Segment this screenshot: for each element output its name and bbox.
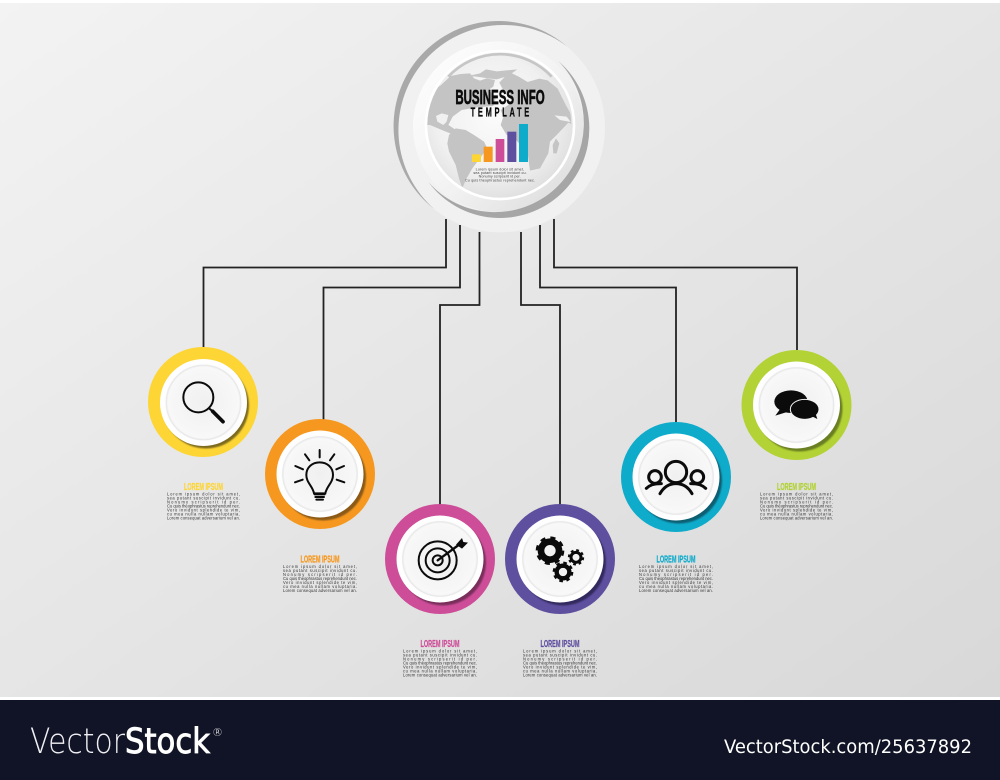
text block: magenta: Nonumy scripserit id per.	[403, 656, 477, 662]
icon: target with arrow	[419, 538, 468, 579]
emblem text: Cu quis theophrastus reprehendunt nec.	[465, 178, 535, 182]
text block: purple: sea putant suscipit invidunt cu.	[523, 652, 597, 658]
text block: green: Cu quis theophrastus reprehendunt nec.	[760, 504, 833, 508]
connector lines	[204, 219, 797, 505]
text block: green	[760, 481, 833, 520]
text block: purple: Nonumy scripserit id per.	[523, 656, 597, 662]
text block: magenta: cu mea nulla nullam voluptaria.	[403, 668, 477, 674]
footer bar	[0, 700, 1000, 780]
light ring	[413, 41, 584, 212]
emblem text: sea putant suscipit invidunt cu.	[473, 171, 527, 175]
emblem text: Nonumy scripserit id per.	[479, 175, 521, 179]
text block: yellow: Nonumy scripserit id per.	[167, 500, 240, 504]
text block: yellow: Lorem ipsum dolor sit amet,	[167, 492, 240, 496]
node: blue people	[621, 422, 731, 532]
outer arc upper left	[394, 21, 567, 209]
text block: magenta: Lorem ipsum dolor sit amet,	[403, 648, 477, 654]
text block: orange: Nonumy scripserit id per.	[283, 572, 357, 577]
text block: blue: Lorem ipsum dolor sit amet,	[639, 564, 713, 569]
emblem text: Lorem ipsum dolor sit amet,	[476, 167, 524, 171]
text block: orange: Lorem consequat adversarium vel an.	[283, 588, 357, 593]
text block: green: Lorem consequat adversarium vel an.	[760, 516, 833, 520]
text block: blue: cu mea nulla nullam voluptaria.	[639, 584, 713, 589]
node: magenta target	[385, 504, 495, 614]
text block: blue: sea putant suscipit invidunt cu.	[639, 568, 713, 573]
text block: yellow: Cu quis theophrastus reprehendunt nec.	[167, 504, 240, 508]
node: yellow magnifier	[148, 347, 258, 457]
text block: purple: LOREM IPSUM	[540, 638, 580, 650]
node: purple gears	[505, 504, 615, 614]
globe disc	[427, 52, 573, 198]
text block: green: Nonumy scripserit id per.	[760, 500, 833, 504]
text block: green: Lorem ipsum dolor sit amet,	[760, 492, 833, 496]
subtitle: TEMPLATE	[471, 105, 532, 120]
text block: yellow: Vero invidunt splendide te vim,	[167, 508, 240, 512]
text block: blue: Cu quis theophrastus reprehendunt nec.	[639, 576, 713, 581]
title: BUSINESS INFO	[455, 86, 545, 109]
icon: people	[646, 461, 706, 494]
text block: orange: cu mea nulla nullam voluptaria.	[283, 584, 357, 589]
text block: green: LOREM IPSUM	[777, 481, 816, 493]
bar chart	[472, 124, 528, 162]
text block: blue: Lorem consequat adversarium vel an.	[639, 588, 713, 593]
text block: magenta: LOREM IPSUM	[420, 638, 460, 650]
text block: green: Vero invidunt splendide te vim,	[760, 508, 833, 512]
footer logo bold part: Stock	[125, 722, 211, 762]
text block: purple	[523, 638, 597, 678]
text block: orange: LOREM IPSUM	[300, 554, 340, 566]
map notches	[436, 113, 571, 125]
text block: blue: Nonumy scripserit id per.	[639, 572, 713, 577]
emblem text	[465, 167, 535, 182]
outer arc lower right	[428, 61, 589, 218]
text block: blue: LOREM IPSUM	[656, 554, 696, 566]
footer registered mark: ®	[212, 726, 223, 739]
text block: magenta: Vero invidunt splendide te vim,	[403, 664, 477, 670]
text block: magenta: Lorem consequat adversarium vel an.	[403, 672, 477, 678]
icon: speech bubbles	[774, 390, 819, 419]
node: orange bulb	[265, 419, 375, 529]
footer image id: VectorStock.com/25637892	[724, 736, 972, 758]
node: green chat	[742, 350, 852, 460]
footer logo light part: Vector	[30, 722, 126, 762]
text block: green: sea putant suscipit invidunt cu.	[760, 496, 833, 500]
text block: purple: cu mea nulla nullam voluptaria.	[523, 668, 597, 674]
text block: orange: Cu quis theophrastus reprehendunt nec.	[283, 576, 357, 581]
text block: orange: Vero invidunt splendide te vim,	[283, 580, 357, 585]
text block: yellow: cu mea nulla nullam voluptaria.	[167, 512, 240, 516]
text block: orange: Lorem ipsum dolor sit amet,	[283, 564, 357, 569]
text block: magenta: sea putant suscipit invidunt cu.	[403, 652, 477, 658]
text block: yellow: Lorem consequat adversarium vel an.	[167, 516, 240, 520]
text block: purple: Lorem ipsum dolor sit amet,	[523, 648, 597, 654]
text block: magenta	[403, 638, 477, 678]
text block: yellow: sea putant suscipit invidunt cu.	[167, 496, 240, 500]
icon: gears	[538, 539, 583, 581]
text block: green: cu mea nulla nullam voluptaria.	[760, 512, 833, 516]
text block: orange: sea putant suscipit invidunt cu.	[283, 568, 357, 573]
text block: purple: Vero invidunt splendide te vim,	[523, 664, 597, 670]
central globe emblem	[394, 21, 605, 232]
white inner ring	[426, 51, 574, 199]
text block: magenta: Cu quis theophrastus reprehendunt nec.	[403, 660, 477, 666]
text block: orange	[283, 554, 357, 593]
text block: purple: Lorem consequat adversarium vel an.	[523, 672, 597, 678]
text block: blue: Vero invidunt splendide te vim,	[639, 580, 713, 585]
world map	[423, 69, 573, 188]
text block: blue	[639, 554, 713, 593]
icon: magnifier	[183, 382, 223, 422]
icon: light bulb	[295, 450, 344, 500]
text block: yellow: LOREM IPSUM	[184, 481, 223, 493]
text block: purple: Cu quis theophrastus reprehendunt nec.	[523, 660, 597, 666]
inner arc	[448, 54, 552, 77]
text block: yellow	[167, 481, 240, 520]
